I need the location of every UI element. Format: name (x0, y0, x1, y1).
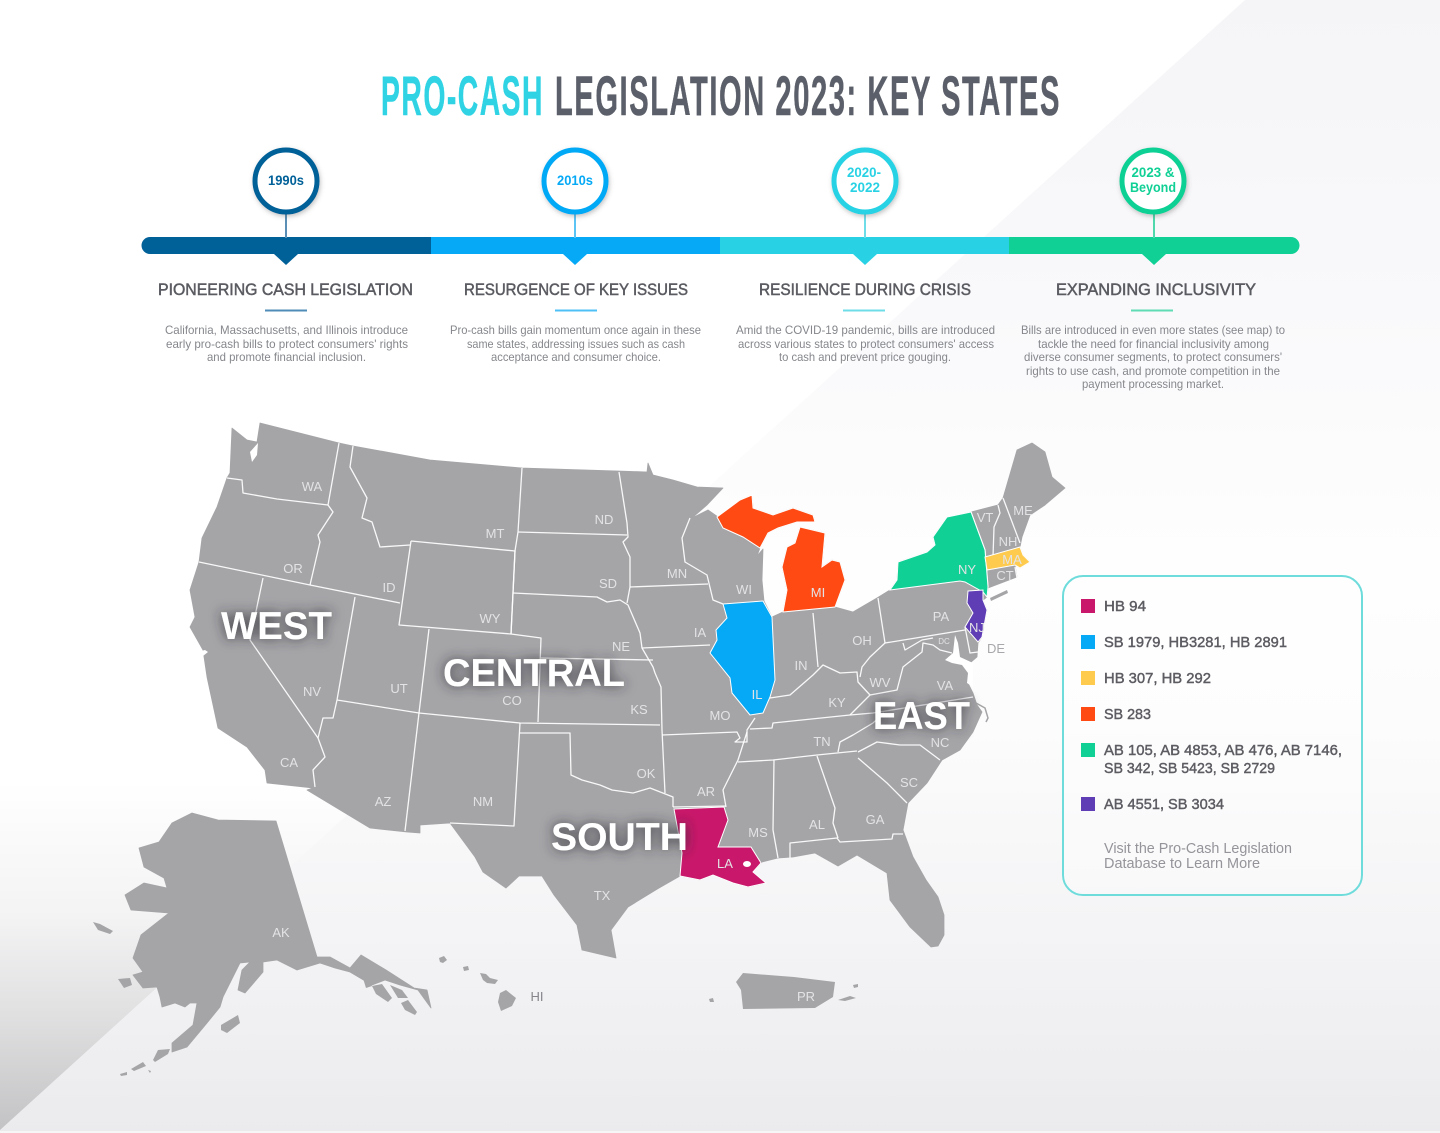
state abbreviation labels: AZ (375, 794, 391, 809)
timeline step: 2010s: acceptance and consumer choice. (491, 350, 661, 364)
state abbreviation labels: TX (594, 888, 611, 903)
state abbreviation labels: SD (599, 576, 617, 591)
contiguous states silhouette (190, 423, 1065, 958)
legend: Michigan bill (1081, 706, 1151, 723)
state abbreviation labels (272, 479, 1033, 1004)
state: New York (890, 512, 988, 597)
state abbreviation labels: IA (694, 625, 706, 640)
legend: New York bills: SB 342, SB 5423, SB 2729 (1104, 760, 1275, 777)
state abbreviation labels: VT (977, 510, 993, 525)
region label: EAST: EAST (873, 695, 970, 738)
legend: New York bills: AB 105, AB 4853, AB 476, AB 7146, (1104, 742, 1342, 759)
state abbreviation labels: NV (303, 684, 321, 699)
state abbreviation labels: IN (794, 658, 808, 673)
legend: database link: Visit the Pro-Cash Legislation (1104, 841, 1292, 857)
timeline step: 2010s (450, 150, 701, 364)
timeline step: 2010s: Pro-cash bills gain momentum once again in these (450, 323, 701, 337)
timeline step: 2023 and beyond (1021, 150, 1285, 391)
legend: database link: Database to Learn More (1104, 856, 1260, 872)
state abbreviation labels: MS (748, 825, 768, 840)
map: United States (93, 423, 1065, 1076)
timeline step: 2020-2022: Amid the COVID-19 pandemic, bills are introduced (736, 323, 995, 337)
timeline step: 2010s: same states, addressing issues such as cash (467, 337, 685, 351)
state abbreviation labels: DC (938, 637, 950, 646)
legend: Massachusetts bills: HB 307, HB 292 (1104, 670, 1211, 687)
timeline step: 2010s: RESURGENCE OF KEY ISSUES (464, 281, 688, 299)
state abbreviation labels: KY (828, 695, 846, 710)
timeline step: 2020-2022: 2020- (847, 164, 881, 180)
state abbreviation labels: DE (987, 641, 1005, 656)
state abbreviation labels: HI (530, 989, 544, 1004)
state abbreviation labels: TN (813, 734, 831, 749)
region label: SOUTH: SOUTH (551, 816, 688, 859)
state abbreviation labels: CA (280, 755, 298, 770)
state abbreviation labels: AK (272, 925, 290, 940)
region label: CENTRAL: CENTRAL (443, 652, 625, 695)
timeline step: 2023 and beyond: payment processing market. (1082, 377, 1224, 391)
timeline step: 1990s (158, 150, 413, 364)
state abbreviation labels: OH (852, 633, 872, 648)
state: Michigan (717, 495, 845, 612)
state abbreviation labels: MA (1002, 552, 1022, 567)
timeline step: 1990s: California, Massachusetts, and Illinois introduce (165, 323, 408, 337)
state abbreviation labels: GA (866, 812, 885, 827)
state borders (199, 443, 1020, 858)
title: PRO-CASH (381, 64, 544, 127)
state abbreviation labels: SC (900, 775, 918, 790)
state abbreviation labels: LA (717, 856, 733, 871)
state abbreviation labels: NE (612, 639, 630, 654)
state: Illinois (710, 601, 775, 715)
state abbreviation labels: MI (811, 585, 825, 600)
state abbreviation labels: AR (697, 784, 715, 799)
timeline step: 2020-2022 (736, 150, 995, 364)
lake pontchartrain (743, 861, 751, 867)
legend: New York bills (1081, 742, 1342, 777)
outer banks (976, 703, 988, 722)
state abbreviation labels: IL (752, 687, 762, 702)
puget sound and bays (197, 443, 973, 687)
state abbreviation labels: CT (996, 568, 1014, 583)
timeline step: 2023 and beyond: rights to use cash, and promote competition in the (1026, 364, 1280, 378)
state abbreviation labels: OR (283, 561, 303, 576)
timeline step: 1990s: PIONEERING CASH LEGISLATION (158, 281, 413, 299)
state: New Jersey (965, 590, 987, 642)
state abbreviation labels: MT (486, 526, 504, 541)
timeline bar (142, 237, 1300, 254)
state abbreviation labels: NJ (969, 620, 985, 635)
timeline step: 2023 and beyond: 2023 & (1132, 164, 1174, 180)
timeline step: 1990s: 1990s (268, 172, 304, 188)
state abbreviation labels: ND (595, 512, 613, 527)
timeline step: 1990s: early pro-cash bills to protect consumers' rights (166, 337, 408, 351)
legend: HB 94: HB 94 (1104, 598, 1146, 615)
legend: database link (1104, 841, 1292, 872)
timeline step: 2020-2022: RESILIENCE DURING CRISIS (759, 281, 971, 299)
state abbreviation labels: NY (958, 562, 976, 577)
title (381, 64, 1061, 127)
state abbreviation labels: ID (382, 580, 396, 595)
state abbreviation labels: NC (931, 735, 949, 750)
state: Massachusetts (985, 547, 1030, 570)
legend: Illinois bills: SB 1979, HB3281, HB 2891 (1104, 634, 1287, 651)
hawaii (439, 956, 516, 1011)
state abbreviation labels: UT (390, 681, 408, 696)
timeline step: 2023 and beyond: tackle the need for financial inclusivity among (1038, 337, 1269, 351)
state abbreviation labels: WA (302, 479, 323, 494)
timeline step: 2010s: 2010s (557, 172, 593, 188)
state abbreviation labels: WY (480, 611, 501, 626)
timeline step: 2023 and beyond: EXPANDING INCLUSIVITY (1056, 281, 1256, 299)
timeline step: 2023 and beyond: Beyond (1130, 179, 1176, 195)
timeline step: 2020-2022: to cash and prevent price gouging. (779, 350, 951, 364)
state abbreviation labels: CO (502, 693, 522, 708)
state abbreviation labels: ME (1013, 503, 1033, 518)
state abbreviation labels: NM (473, 794, 493, 809)
state abbreviation labels: WV (870, 675, 891, 690)
region label: WEST: WEST (221, 605, 332, 648)
legend panel (1063, 576, 1362, 895)
legend: New Jersey bills: AB 4551, SB 3034 (1104, 796, 1224, 813)
timeline step: 1990s: and promote financial inclusion. (207, 350, 366, 364)
state abbreviation labels: NH (999, 534, 1017, 549)
state abbreviation labels: KS (630, 702, 648, 717)
legend: HB 94 (1081, 598, 1146, 615)
state abbreviation labels: MO (710, 708, 730, 723)
long island (990, 590, 1008, 601)
timeline step: 2020-2022: across various states to protect consumers' access (738, 337, 994, 351)
state abbreviation labels: OK (637, 766, 656, 781)
timeline step: 2023 and beyond: Bills are introduced in even more states (see map) to (1021, 323, 1285, 337)
state abbreviation labels: MN (667, 566, 687, 581)
alaska islands (93, 922, 417, 1076)
state abbreviation labels: WI (736, 582, 752, 597)
timeline step: 2020-2022: 2022 (850, 179, 880, 195)
state abbreviation labels: VA (937, 678, 954, 693)
state abbreviation labels: AL (809, 817, 825, 832)
state: Louisiana (674, 807, 766, 887)
puerto rico (709, 973, 858, 1009)
alaska (125, 813, 431, 1052)
timeline step: 2023 and beyond: diverse consumer segments, to protect consumers' (1024, 350, 1282, 364)
state abbreviation labels: PR (797, 989, 815, 1004)
legend: Michigan bill: SB 283 (1104, 706, 1151, 723)
state abbreviation labels: PA (933, 609, 950, 624)
